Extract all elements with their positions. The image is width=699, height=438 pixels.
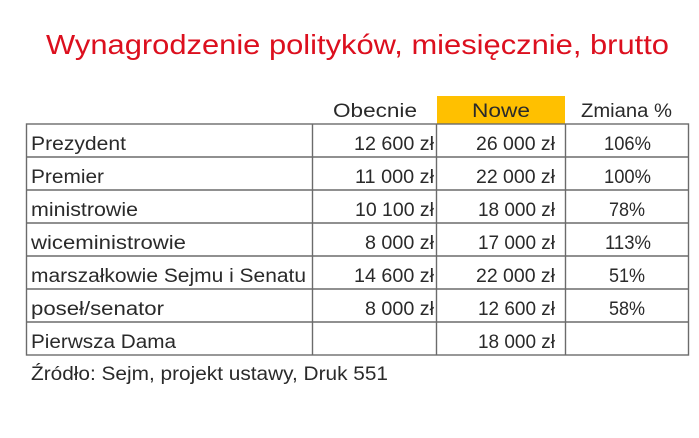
- title: Wynagrodzenie polityków, miesięcznie, brutto: [46, 29, 669, 60]
- column: Nowe values: 17 000 zł: [478, 233, 556, 254]
- column: Obecnie values: 8 000 zł: [365, 299, 435, 320]
- column: Obecnie values: 11 000 zł: [355, 167, 435, 188]
- source note: Źródło: Sejm, projekt ustawy, Druk 551: [31, 364, 388, 385]
- row labels: [30, 134, 306, 353]
- column: Zmiana values: 51%: [609, 266, 645, 287]
- column: Obecnie values: 12 600 zł: [354, 134, 435, 155]
- column: Zmiana values: 78%: [609, 200, 645, 221]
- column: Obecnie values: 14 600 zł: [354, 266, 435, 287]
- column: Zmiana values: 106%: [604, 134, 651, 155]
- column: Nowe values: 18 000 zł: [478, 332, 556, 353]
- column: Obecnie values: 8 000 zł: [365, 233, 435, 254]
- column: Nowe values: 12 600 zł: [478, 299, 556, 320]
- column headers: Zmiana %: [581, 101, 672, 122]
- table grid: [26, 124, 688, 355]
- column: Nowe values: 22 000 zł: [476, 167, 556, 188]
- column headers: Nowe: [472, 101, 530, 122]
- column: Zmiana values: 58%: [609, 299, 645, 320]
- column: Zmiana values: 113%: [605, 233, 651, 254]
- header highlight: Nowe: [437, 96, 565, 124]
- column: Nowe values: 22 000 zł: [476, 266, 556, 287]
- column: Nowe values: 26 000 zł: [476, 134, 556, 155]
- row labels: ministrowie: [31, 200, 138, 221]
- column: Nowe values: 18 000 zł: [478, 200, 556, 221]
- row labels: wiceministrowie: [30, 233, 186, 254]
- table: [26, 96, 688, 355]
- column: Obecnie values: 10 100 zł: [355, 200, 435, 221]
- column headers: [333, 101, 672, 122]
- column: Nowe values: [476, 134, 556, 353]
- row labels: marszałkowie Sejmu i Senatu: [31, 266, 306, 287]
- row labels: Prezydent: [31, 134, 127, 155]
- column headers: Obecnie: [333, 101, 417, 122]
- column: Zmiana values: 100%: [604, 167, 651, 188]
- row labels: Pierwsza Dama: [31, 332, 176, 353]
- column: Obecnie values: [354, 134, 435, 320]
- column: Zmiana values: [604, 134, 651, 320]
- row labels: poseł/senator: [31, 299, 165, 320]
- row labels: Premier: [31, 167, 105, 188]
